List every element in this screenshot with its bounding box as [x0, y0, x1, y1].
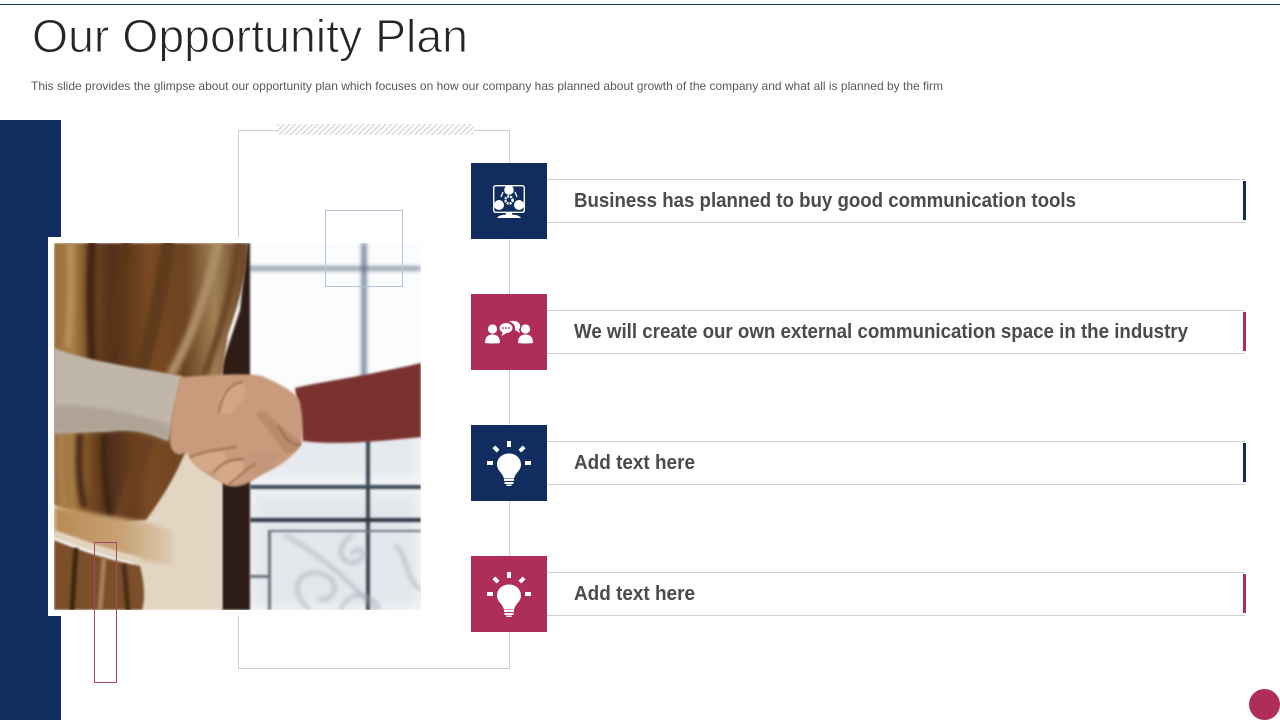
row 2 text: We will create our own external communication space in the industry [574, 321, 1189, 343]
row 1 text: Business has planned to buy good communication tools [574, 190, 1076, 212]
fingers and thumb shading [190, 382, 302, 485]
ironwork [285, 535, 421, 610]
row 2 text bar [547, 310, 1245, 354]
row 1 text bar [547, 180, 1245, 222]
row 2 icon tile [471, 294, 547, 370]
icon: monitor with gear [494, 185, 524, 218]
title: Our Opportunity Plan [32, 10, 468, 62]
row 3 icon tile [471, 425, 547, 501]
cream wall [134, 452, 224, 610]
dark red sleeve [295, 363, 421, 443]
white photo border [48, 237, 427, 616]
light sleeve [54, 348, 182, 441]
left navy sidebar [0, 120, 61, 720]
row 4 text bar [547, 572, 1245, 616]
curtain tie band [54, 506, 172, 566]
hatched strip on frame [277, 124, 474, 135]
subtitle: This slide provides the glimpse about our opportunity plan which focuses on how our company has planned about growth of the company and what all is planned by the firm [31, 79, 943, 93]
row 4 [471, 556, 1246, 632]
row 3 [471, 425, 1246, 501]
thin blue square outline over photo [326, 210, 402, 286]
dark window post [222, 243, 250, 610]
clasped hands [170, 374, 303, 486]
curtain [54, 243, 247, 525]
crimson corner circle [1249, 689, 1280, 720]
lower curtain [54, 540, 144, 610]
row 3 text: Add text here [574, 452, 695, 474]
photo: handshake [48, 237, 427, 616]
row 4 text: Add text here [574, 583, 695, 605]
row 1 [471, 163, 1246, 239]
row 2 [471, 294, 1246, 370]
thin crimson rectangle outline over photo [94, 542, 116, 682]
row 4 icon tile [471, 556, 547, 632]
top rule [0, 4, 1280, 5]
icon: light bulb [487, 572, 531, 617]
decorative outline frame behind photo [238, 130, 510, 668]
icon: light bulb [487, 441, 531, 486]
icon: two people talking [485, 321, 533, 343]
window background [54, 243, 421, 610]
row 1 icon tile [471, 163, 547, 239]
row 3 text bar [547, 442, 1245, 484]
